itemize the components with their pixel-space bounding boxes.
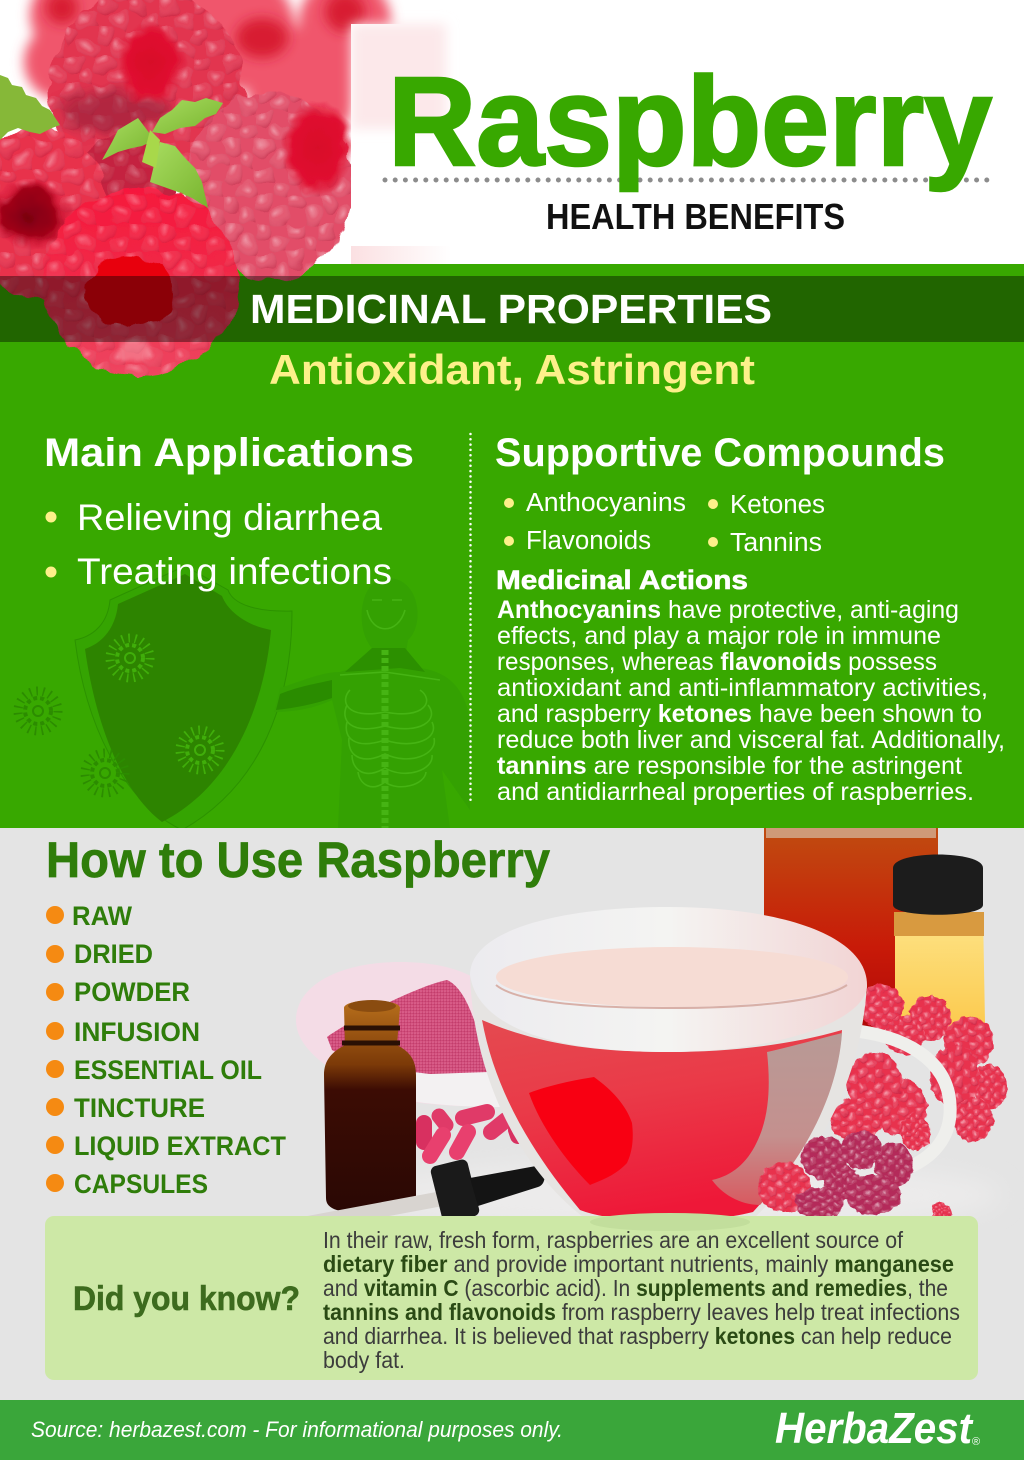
list: forms of use: RAW xyxy=(72,901,132,931)
capsules xyxy=(424,1112,518,1156)
text block: medicinal actions: effects, and play a major role in immune xyxy=(497,622,941,650)
cup glass body xyxy=(470,975,867,1222)
list: forms of use: ESSENTIAL OIL xyxy=(74,1055,262,1085)
tea surface xyxy=(496,947,848,1007)
compound list: Ketones xyxy=(730,491,825,519)
text block: medicinal actions: responses, whereas flavonoids possess xyxy=(497,648,937,676)
glass dropper xyxy=(300,1158,545,1225)
compound list: Anthocyanins xyxy=(526,489,686,517)
text block: medicinal actions xyxy=(497,596,1005,806)
text block: medicinal actions: and antidiarrheal properties of raspberries. xyxy=(497,778,974,806)
panel: supportive compounds xyxy=(495,431,1005,806)
fresh raspberries xyxy=(830,984,1007,1150)
subtitle: health benefits: HEALTH BENEFITS xyxy=(546,196,845,237)
faint cup silhouette through callout xyxy=(590,1213,750,1231)
callout text: dietary fiber and provide important nutrients, mainly manganese xyxy=(323,1251,954,1277)
jar of raspberry extract xyxy=(764,828,938,1028)
text block: medicinal actions: reduce both liver and visceral fat. Additionally, xyxy=(497,726,1005,754)
amber dropper bottle xyxy=(324,1000,416,1213)
text block: medicinal actions: and raspberry ketones have been shown to xyxy=(497,700,982,728)
heading: main applications: Main Applications xyxy=(44,431,414,475)
cup rim xyxy=(470,907,867,1052)
berry: front xyxy=(42,188,238,376)
darker gaps between background berries xyxy=(46,0,365,58)
berry: top xyxy=(47,0,248,162)
logo: HerbaZest: HerbaZest xyxy=(775,1404,974,1453)
shield xyxy=(75,566,292,830)
callout: did you know xyxy=(45,1213,978,1380)
list item: treating infections: Treating infections xyxy=(77,551,392,592)
callout text: and vitamin C (ascorbic acid). In supplements and remedies, the xyxy=(323,1275,948,1301)
subheading: antioxidant, astringent: Antioxidant, Astringent xyxy=(269,346,755,393)
bowl of raspberry powder xyxy=(296,962,500,1107)
list: forms of use: DRIED xyxy=(74,939,153,969)
heading band: medicinal properties xyxy=(0,276,1024,342)
callout text: tannins and flavonoids from raspberry leaves help treat infections xyxy=(323,1299,960,1325)
callout heading: Did you know? xyxy=(73,1280,300,1318)
title panel: white card xyxy=(351,24,1024,264)
berry: middle crumpled xyxy=(88,134,176,196)
compound list xyxy=(504,489,825,557)
dotted title divider xyxy=(385,178,990,182)
human skeleton figure xyxy=(274,578,470,828)
dried raspberries xyxy=(758,1131,951,1222)
list: forms of use: POWDER xyxy=(74,977,190,1007)
callout text: In their raw, fresh form, raspberries are an excellent source of xyxy=(323,1227,904,1253)
viruses xyxy=(18,638,220,793)
mint leaves xyxy=(0,75,223,208)
panel: main applications xyxy=(44,431,414,592)
bright tea blob xyxy=(529,1077,633,1185)
panel: how to use background xyxy=(0,828,1024,1400)
list: forms of use: INFUSION xyxy=(74,1017,200,1047)
blurred background raspberries xyxy=(24,0,391,143)
hero image: raspberries and mint xyxy=(0,0,391,376)
footer xyxy=(0,1400,1024,1460)
callout text: and diarrhea. It is believed that raspberry ketones can help reduce xyxy=(323,1323,952,1349)
illustration: raspberry products xyxy=(296,828,1007,1230)
berry: right xyxy=(186,91,354,279)
callout text: body fat. xyxy=(323,1347,405,1373)
panel: green medicinal section background xyxy=(0,264,1024,828)
list: forms of use: CAPSULES xyxy=(74,1169,208,1199)
title: Raspberry: Raspberry xyxy=(388,51,992,192)
text block: medicinal actions: antioxidant and anti-inflammatory activities, xyxy=(497,674,988,702)
text block: medicinal actions: tannins are responsible for the astringent xyxy=(497,752,962,780)
cup handle xyxy=(847,1030,950,1166)
heading: how to use raspberry: How to Use Raspberry xyxy=(46,832,550,888)
text block: medicinal actions: Anthocyanins have protective, anti-aging xyxy=(497,596,959,624)
heading: medicinal actions: Medicinal Actions xyxy=(496,565,748,595)
source note: Source: herbazest.com - For informational purposes only. xyxy=(31,1417,563,1442)
soft floor highlight xyxy=(360,1160,1000,1230)
callout text xyxy=(323,1227,960,1373)
glass cup of raspberry tea xyxy=(470,907,950,1222)
illustration: shield, viruses and skeleton body xyxy=(18,566,470,830)
list item: relieving diarrhea: Relieving diarrhea xyxy=(77,497,382,538)
heading: medicinal properties: MEDICINAL PROPERTIES xyxy=(250,286,772,332)
list: forms of use: LIQUID EXTRACT xyxy=(74,1131,286,1161)
list: forms of use: TINCTURE xyxy=(74,1093,205,1123)
list: forms of use xyxy=(46,901,286,1199)
tea reflection wedge xyxy=(712,1033,842,1205)
tea xyxy=(482,1020,842,1222)
heading: supportive compounds: Supportive Compounds xyxy=(495,431,945,475)
compound list: Flavonoids xyxy=(526,527,651,555)
registered mark: ® xyxy=(972,1436,980,1448)
compound list: Tannins xyxy=(730,529,822,557)
vial of oil xyxy=(893,854,985,1035)
berry: left xyxy=(0,126,108,298)
